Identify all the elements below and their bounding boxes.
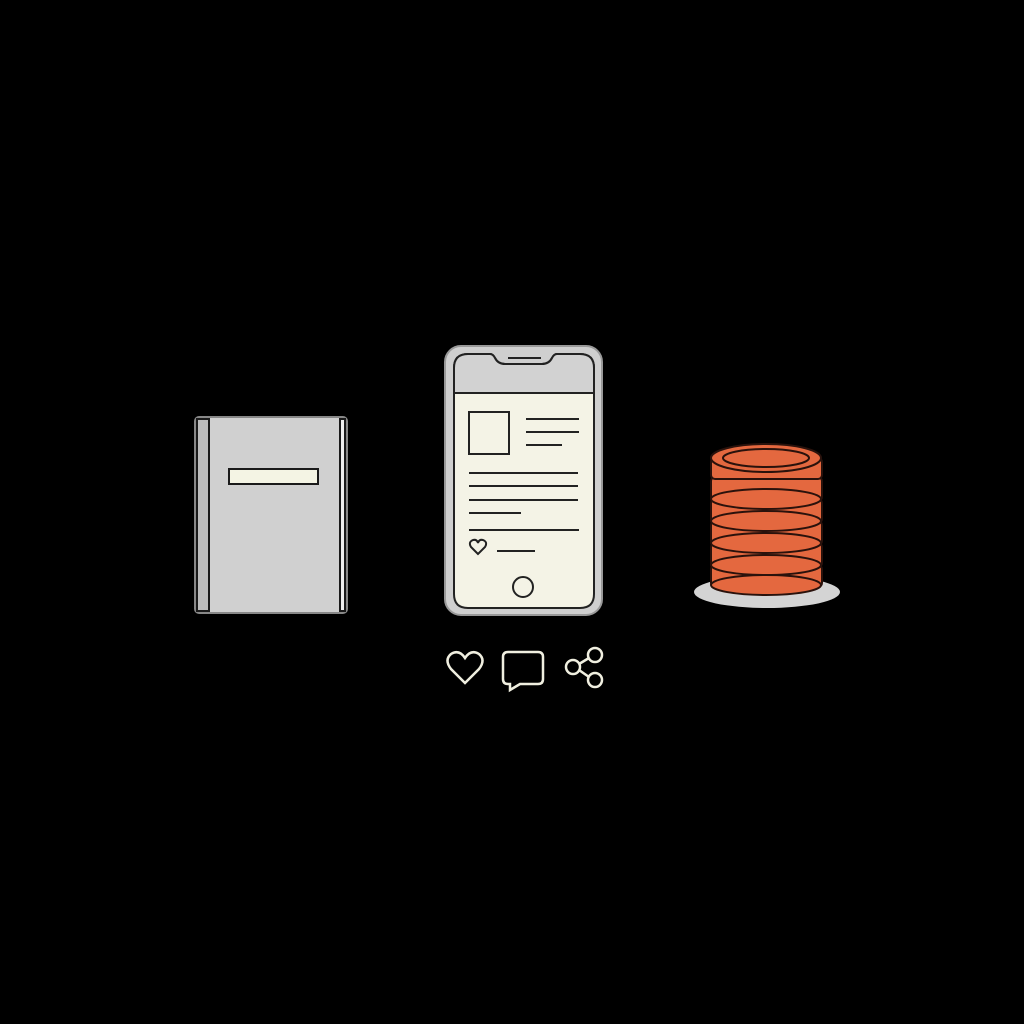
icon: heart — [448, 652, 482, 683]
icon row: social actions — [448, 648, 602, 690]
icon: comment — [503, 652, 543, 690]
icon: phone — [445, 346, 602, 615]
icon: book — [195, 417, 347, 613]
icon: coin stack — [694, 444, 840, 608]
icon: share — [566, 648, 602, 687]
